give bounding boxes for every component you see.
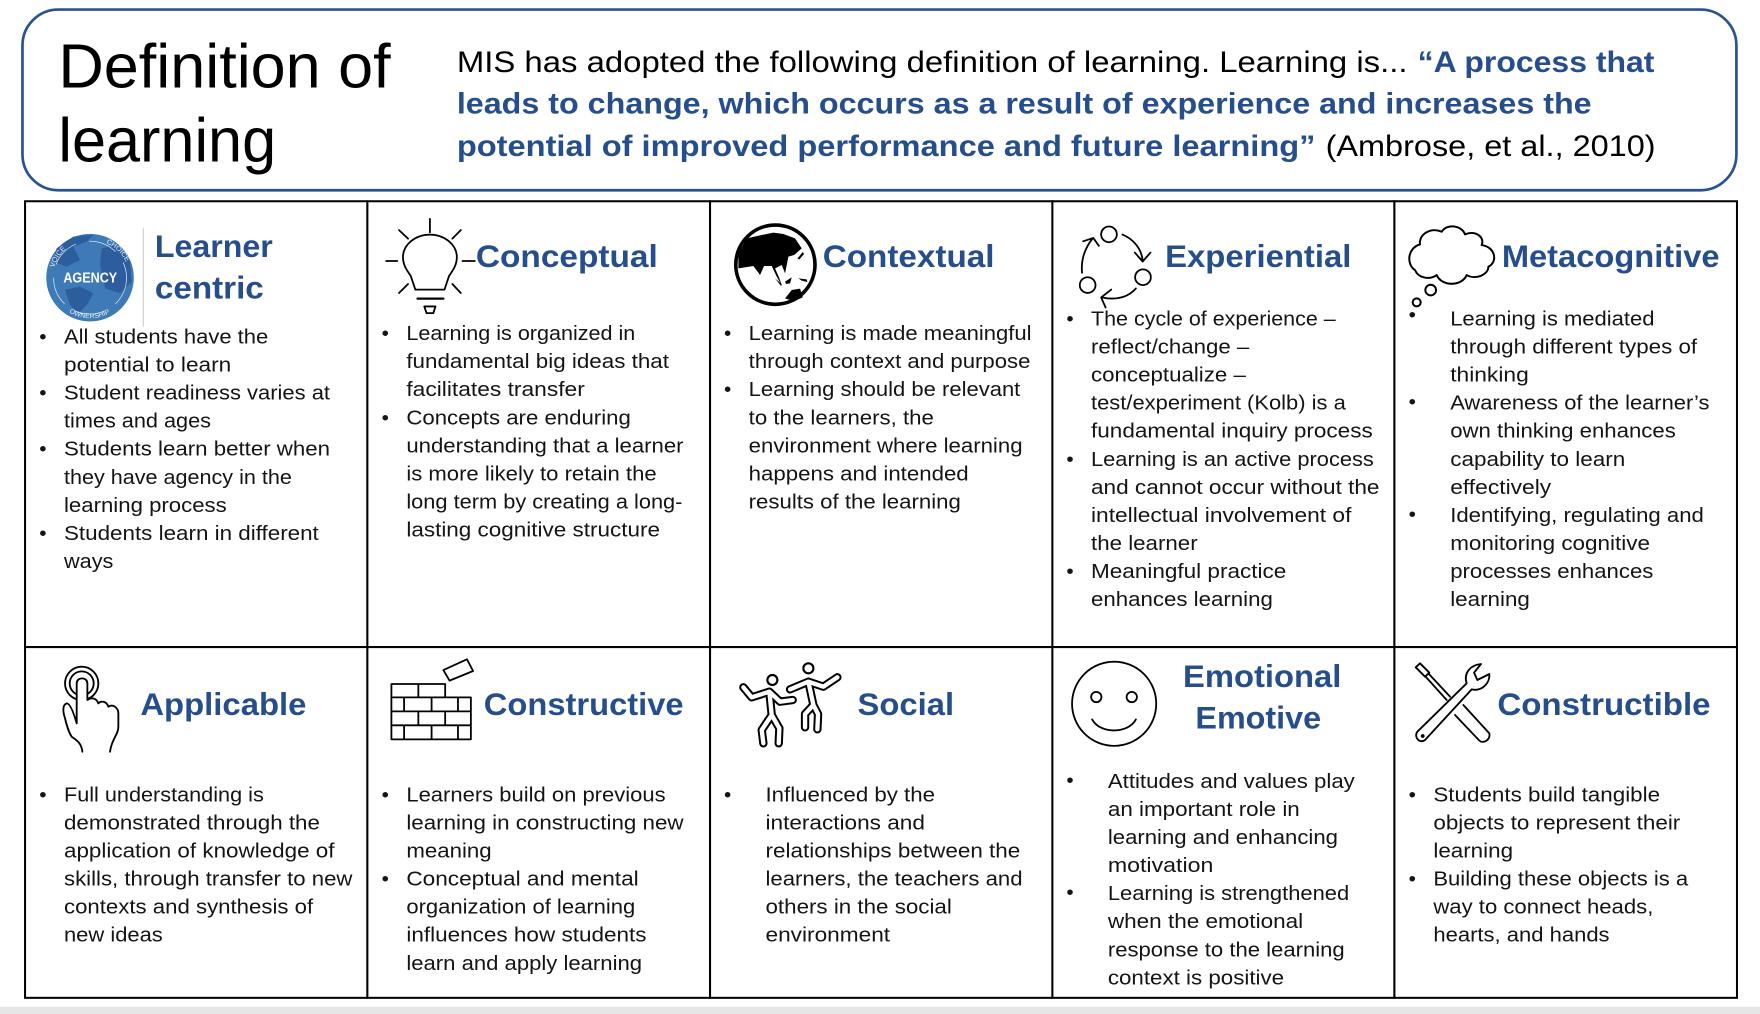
bullet list: thinking <box>1450 364 1529 387</box>
panel: Conceptual <box>367 201 710 647</box>
bullet list: learn and apply learning <box>406 952 642 975</box>
bullet text: learners, the teachers and <box>766 868 1023 891</box>
bullet list: and cannot occur without the <box>1091 476 1379 499</box>
bullet text: Full understanding is <box>64 783 264 806</box>
icon: agency globe: VOICE <box>49 246 66 266</box>
bullet list: hearts, and hands <box>1433 924 1610 947</box>
icon: thought cloud <box>1409 226 1494 306</box>
definition text: (Ambrose, et al., 2010) <box>1326 130 1656 163</box>
bullet list: learning and enhancing <box>1108 826 1338 849</box>
heading: Emotive <box>1195 700 1321 735</box>
bullet text: Influenced by the <box>766 783 935 806</box>
bullet list: Learners build on previous <box>406 783 666 806</box>
bullet list: learning <box>1433 840 1513 863</box>
bullet list: meaning <box>406 840 492 863</box>
bullet list: • <box>39 438 47 461</box>
bullet list: the learner <box>1091 532 1198 555</box>
bullet list: Learning is made meaningful <box>749 322 1032 345</box>
bullet list: learning <box>1450 588 1530 611</box>
bullet list: when the emotional <box>1107 910 1303 933</box>
heading: Conceptual <box>476 239 658 274</box>
bullet list: Conceptual and mental <box>406 868 639 891</box>
definition text: leads to change, which occurs as a result of experience and increases the <box>457 87 1592 120</box>
bullet list: • <box>1066 881 1074 904</box>
bullet list: Learning is mediated <box>1450 308 1654 331</box>
bullet list: way to connect heads, <box>1432 896 1653 919</box>
bullet list: • <box>39 325 47 348</box>
bullet text <box>39 783 354 947</box>
bullet list: Learning should be relevant <box>749 378 1021 401</box>
bullet list: effectively <box>1450 476 1552 499</box>
bullet list: through context and purpose <box>749 350 1030 373</box>
bullet list: organization of learning <box>406 896 635 919</box>
icon: agency globe: OWNERSHIP <box>70 309 108 318</box>
bullet list <box>1066 308 1379 611</box>
bullet text <box>724 783 1023 947</box>
icon: brick wall <box>391 659 473 739</box>
bullet list <box>39 325 330 573</box>
panel: Emotional Emotive <box>1052 647 1394 998</box>
bullet list: • <box>724 378 731 401</box>
bullet list <box>724 322 1032 513</box>
bullet list <box>1409 304 1709 611</box>
bullet list: lasting cognitive structure <box>406 519 660 542</box>
bullet list: they have agency in the <box>64 466 292 489</box>
icon: agency globe <box>46 228 144 327</box>
heading <box>155 229 273 306</box>
heading: Metacognitive <box>1502 239 1720 274</box>
bullet list: to the learners, the <box>749 406 934 429</box>
bullet list: Students learn in different <box>64 522 319 545</box>
bullet list: test/experiment (Kolb) is a <box>1091 392 1346 415</box>
bullet text: relationships between the <box>766 840 1020 863</box>
bullet list: • <box>1409 304 1416 327</box>
definition text: “A process that <box>1418 46 1655 79</box>
heading: centric <box>155 271 264 306</box>
bullet list: facilitates transfer <box>406 378 585 401</box>
bullet list: processes enhances <box>1450 560 1653 583</box>
bullet list: Learning is strengthened <box>1108 882 1349 905</box>
bullet list: • <box>1066 308 1074 331</box>
heading: Learner <box>155 229 273 264</box>
bullet list: intellectual involvement of <box>1091 504 1352 527</box>
heading: Emotional <box>1183 659 1341 694</box>
heading: Experiential <box>1165 239 1351 274</box>
bullet list: through different types of <box>1450 336 1697 359</box>
icon: pointing hand <box>63 667 118 752</box>
bullet list: learning process <box>64 494 227 517</box>
bullet list <box>1409 783 1689 947</box>
icon: light bulb <box>386 219 475 313</box>
bullet list: Building these objects is a <box>1433 868 1689 891</box>
bullet list: • <box>382 868 389 891</box>
bullet text: • <box>724 783 731 806</box>
bullet list: Student readiness varies at <box>64 382 330 405</box>
bullet list: fundamental inquiry process <box>1091 420 1373 443</box>
bullet text: contexts and synthesis of <box>64 896 313 919</box>
bullet list: long term by creating a long- <box>406 490 682 513</box>
bullet list: objects to represent their <box>1433 811 1680 834</box>
bullet text: skills, through transfer to new <box>64 868 354 891</box>
bullet list: times and ages <box>64 410 211 433</box>
bullet list: enhances learning <box>1091 588 1273 611</box>
bullet list: The cycle of experience – <box>1091 308 1336 331</box>
panel: Applicable <box>25 647 367 998</box>
panel: Learner centric <box>24 200 368 648</box>
bullet list: • <box>382 406 389 429</box>
bullet list: • <box>1066 769 1074 792</box>
bullet list: response to the learning <box>1108 938 1345 961</box>
bullet text: interactions and <box>766 811 925 834</box>
bullet list: Learning is an active process <box>1091 448 1374 471</box>
panel: Constructible <box>1394 647 1737 998</box>
bullet list: • <box>382 322 389 345</box>
bullet list: Students build tangible <box>1433 783 1660 806</box>
bullet list: own thinking enhances <box>1450 420 1676 443</box>
bullet list: • <box>1409 783 1416 806</box>
bullet list: environment where learning <box>749 434 1023 457</box>
heading: Applicable <box>140 687 306 722</box>
icon: smiley face <box>1072 662 1156 746</box>
heading: Social <box>858 687 954 722</box>
definition text <box>457 46 1656 163</box>
bullet list: understanding that a learner <box>406 434 684 457</box>
panel: Metacognitive <box>1394 201 1737 647</box>
bullet list <box>1066 769 1355 989</box>
bullet text: others in the social <box>766 896 952 919</box>
heading: Constructive <box>484 687 684 722</box>
bullet list: influences how students <box>406 924 647 947</box>
bullet list: Students learn better when <box>64 438 330 461</box>
bullet list <box>382 783 685 975</box>
bullet list: • <box>1409 391 1416 414</box>
bullet list: Awareness of the learner’s <box>1450 392 1709 415</box>
icon: agency globe: AGENCY <box>63 270 117 286</box>
bullet list: reflect/change – <box>1091 336 1250 359</box>
heading <box>1183 659 1341 735</box>
panel: Constructive <box>367 647 710 998</box>
bullet list: happens and intended <box>749 462 969 485</box>
title <box>58 33 391 176</box>
bullet list: Learning is organized in <box>406 322 635 345</box>
bullet text: environment <box>766 924 890 947</box>
bullet text: demonstrated through the <box>64 811 320 834</box>
bullet list: Meaningful practice <box>1091 560 1286 583</box>
bullet list: • <box>1066 560 1074 583</box>
panel: Experiential <box>1052 201 1394 647</box>
bullet list: • <box>39 522 47 545</box>
bullet list: fundamental big ideas that <box>406 350 669 373</box>
bullet list: • <box>39 382 47 405</box>
panel: Contextual <box>710 201 1052 647</box>
panel: Social <box>710 647 1052 998</box>
bullet list: • <box>1066 448 1074 471</box>
definition text: MIS has adopted the following definition of learning. Learning is... <box>457 46 1408 79</box>
bullet list: • <box>382 783 389 806</box>
bullet list: monitoring cognitive <box>1450 532 1650 555</box>
icon: dancing figures <box>743 663 837 743</box>
bullet list: an important role in <box>1108 798 1300 821</box>
bullet list: Concepts are enduring <box>406 406 631 429</box>
bullet list: results of the learning <box>749 490 961 513</box>
title: learning <box>58 107 276 176</box>
bullet list: Attitudes and values play <box>1108 770 1355 793</box>
bullet list: • <box>1409 503 1416 526</box>
bullet list: context is positive <box>1108 966 1284 989</box>
icon: globe <box>736 225 815 304</box>
bullet list: • <box>1409 868 1416 891</box>
bullet text: • <box>39 783 47 806</box>
icon: cycle <box>1080 227 1151 308</box>
title: Definition of <box>58 33 391 102</box>
bullet text: new ideas <box>64 924 163 947</box>
bullet list: capability to learn <box>1450 448 1625 471</box>
bullet list <box>382 322 684 542</box>
bullet list: conceptualize – <box>1091 364 1246 387</box>
definition text: potential of improved performance and future learning” <box>457 130 1316 163</box>
bullet text: application of knowledge of <box>64 840 335 863</box>
bullet list: Identifying, regulating and <box>1450 504 1704 527</box>
bullet list: All students have the <box>64 325 268 348</box>
bullet list: • <box>724 322 731 345</box>
bullet list: ways <box>63 550 113 573</box>
heading: Contextual <box>823 239 994 274</box>
bullet list: learning in constructing new <box>406 811 685 834</box>
bullet list: motivation <box>1108 854 1213 877</box>
bullet list: potential to learn <box>64 354 231 377</box>
icon: agency globe: CHOICE <box>107 240 130 262</box>
bullet list: is more likely to retain the <box>406 462 657 485</box>
heading: Constructible <box>1497 687 1711 722</box>
icon: crossed tools <box>1416 663 1490 742</box>
header panel <box>22 10 1736 190</box>
